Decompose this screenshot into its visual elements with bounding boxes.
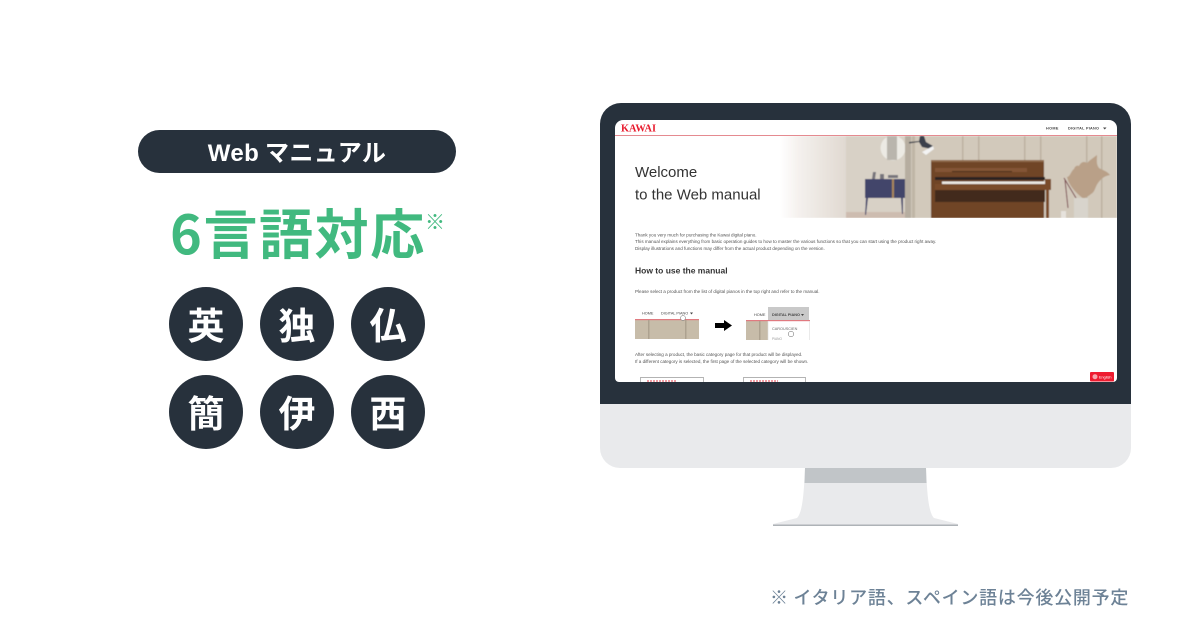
- intro text: This manual explains everything from basic operation guides to how to master the various functions so that you can start using the product right away.: [635, 239, 936, 244]
- heading: 6 languages supported: 6言語対応: [170, 191, 426, 270]
- description text: After selecting a product, the basic category page for that product will be displayed.: [635, 352, 802, 357]
- monitor illustration: [600, 103, 1131, 526]
- arrow: [715, 320, 732, 331]
- step 2 thumbnail: CAROUSCIEN: [772, 327, 798, 331]
- hero title: to the Web manual: [635, 186, 761, 204]
- footnote: ※ イタリア語、スペイン語は今後公開予定: [770, 584, 1129, 610]
- language circles: [169, 287, 425, 449]
- step 1 thumbnail: DIGITAL PIANO: [661, 312, 688, 316]
- description text: [635, 352, 808, 364]
- language: German: 独: [278, 296, 316, 350]
- language: French: [351, 287, 425, 361]
- hero photo: piano room: [780, 136, 1117, 218]
- step 1 thumbnail: [635, 312, 699, 339]
- site header: DIGITAL PIANO: [1068, 127, 1099, 131]
- language: English: 英: [188, 296, 224, 350]
- step 1 thumbnail: HOME: [642, 312, 654, 316]
- language: Simplified Chinese: 簡: [188, 384, 224, 438]
- language: Simplified Chinese: [169, 375, 243, 449]
- site header: KAWAI: [621, 124, 656, 134]
- description text: If a different category is selected, the first page of the selected category will be shown.: [635, 359, 808, 364]
- intro text: [635, 232, 936, 251]
- badge: Web manual: Web マニュアル: [208, 133, 386, 168]
- language: French: 仏: [370, 296, 406, 350]
- language button: English: [1099, 375, 1111, 379]
- language: Italian: 伊: [278, 384, 316, 438]
- monitor body: [600, 103, 1131, 468]
- monitor stand: [773, 468, 958, 526]
- step 2 thumbnail: HOME: [754, 313, 766, 317]
- step 2 thumbnail: PIANO: [772, 337, 782, 341]
- intro text: Display illustrations and functions may differ from the actual product depending on the version.: [635, 246, 825, 251]
- language button: [1090, 372, 1114, 382]
- hero title: Welcome: [635, 164, 697, 181]
- heading: 6 languages supported: ※: [425, 206, 445, 235]
- instruction text: Please select a product from the list of digital pianos in the top right and refer to the manual.: [635, 289, 820, 294]
- language: English: [169, 287, 243, 361]
- category cards: [640, 378, 806, 382]
- step 2 thumbnail: DIGITAL PIANO: [772, 313, 800, 317]
- badge: Web manual: [138, 130, 456, 173]
- site header: HOME: [1046, 127, 1059, 131]
- language: German: [260, 287, 334, 361]
- language: Spanish: [351, 375, 425, 449]
- section heading: How to use the manual: [635, 266, 728, 276]
- screen: web manual page: [615, 120, 1117, 382]
- intro text: Thank you very much for purchasing the Kawai digital piano.: [635, 232, 757, 238]
- hero title: [635, 164, 761, 204]
- language: Spanish: 西: [370, 384, 406, 438]
- pampas grass: [1064, 155, 1110, 208]
- language: Italian: [260, 375, 334, 449]
- site header: [615, 124, 1117, 136]
- step 2 thumbnail: [746, 307, 810, 341]
